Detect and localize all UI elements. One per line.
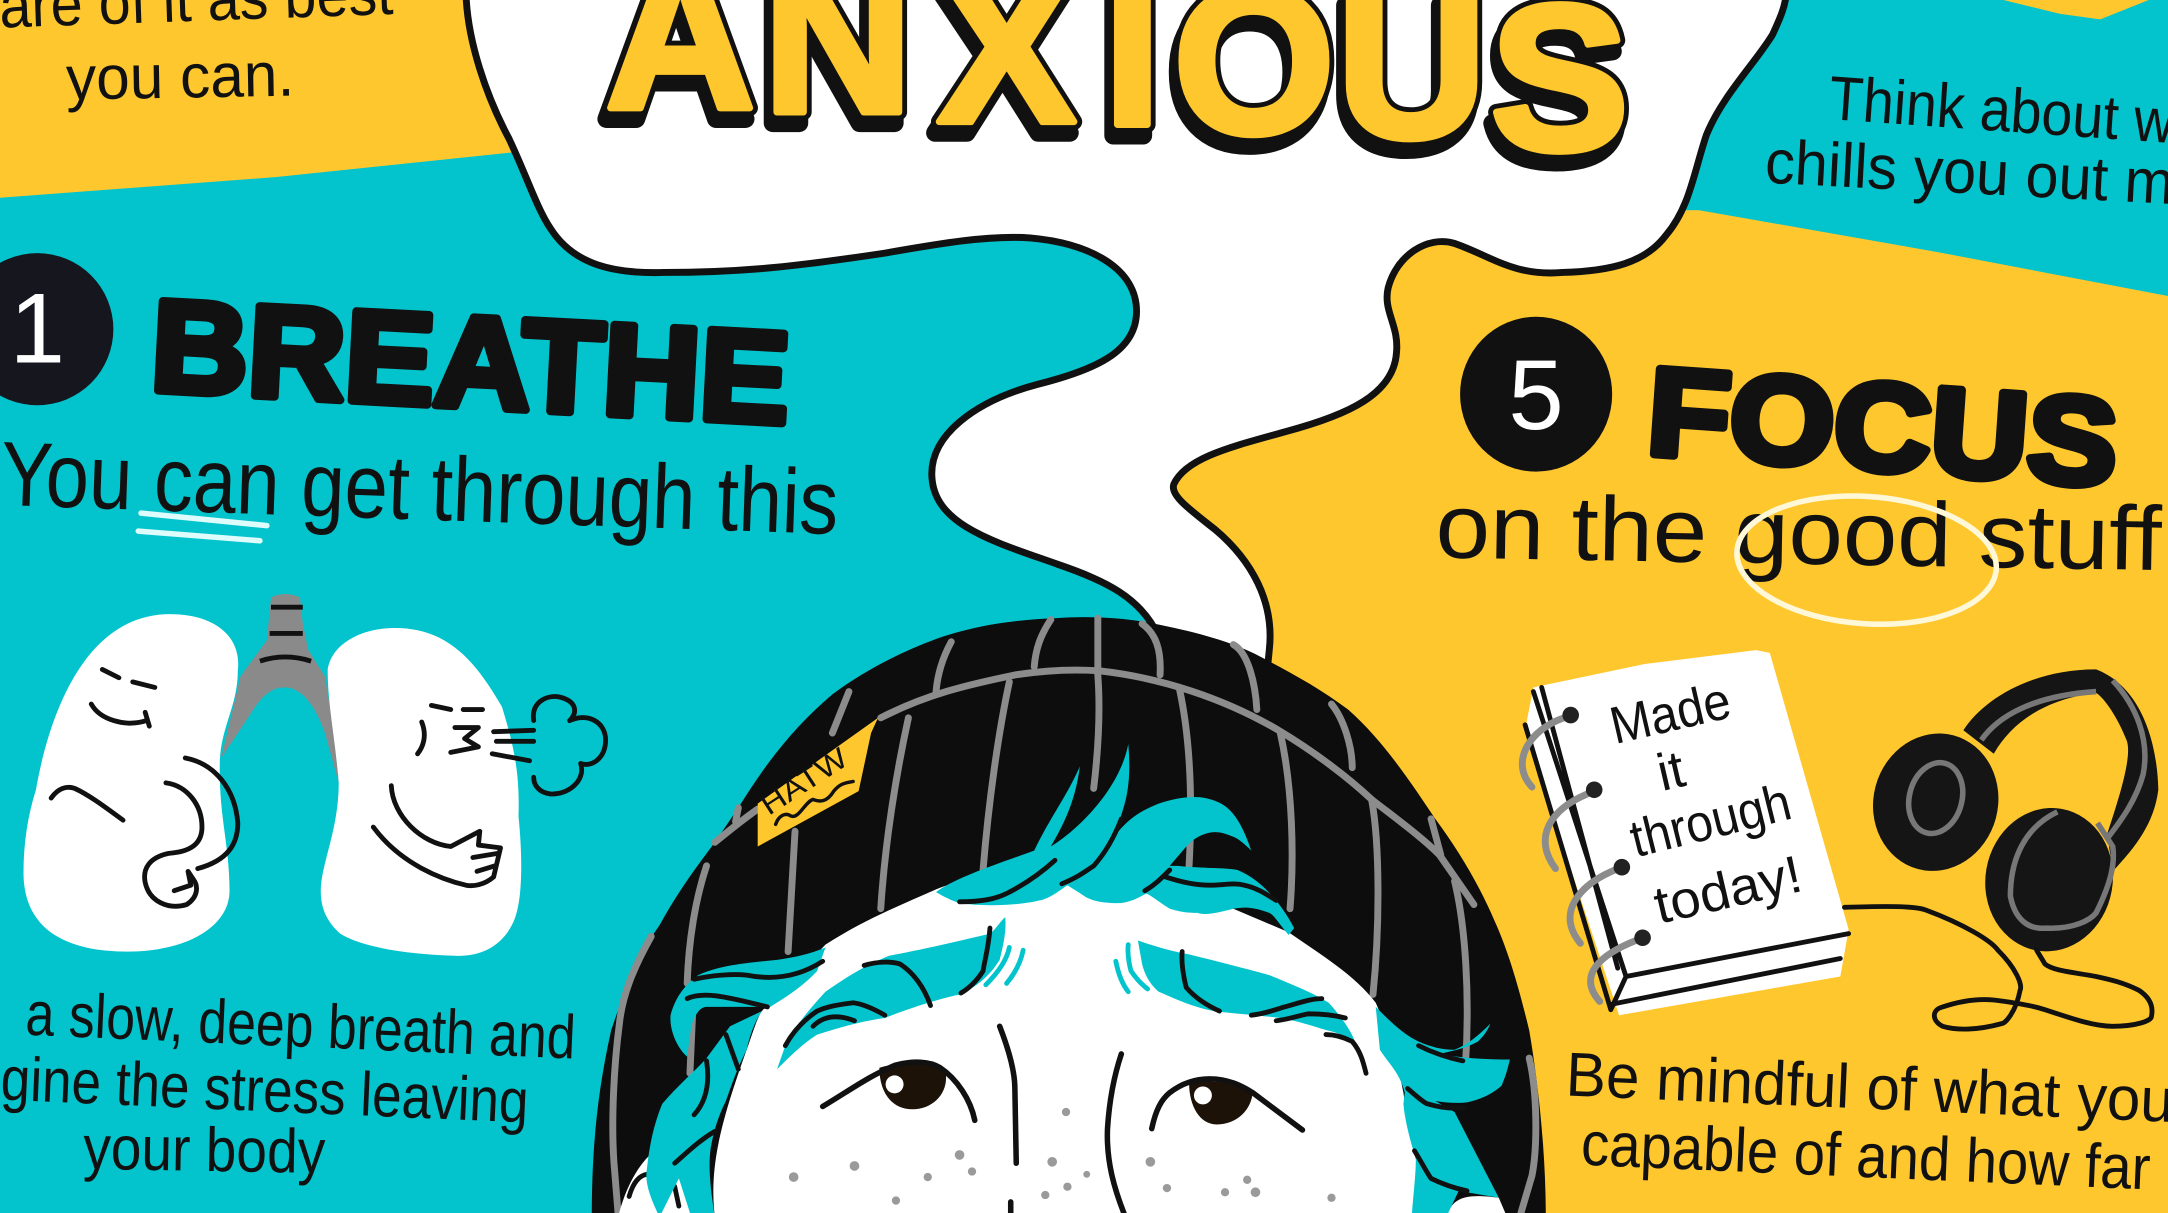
heading: FOCUS: FOCUS bbox=[1643, 342, 2122, 513]
body text: breathe bbox=[0, 980, 577, 1187]
step 1 badge bbox=[0, 253, 113, 405]
body text: breathe: gine the stress leaving bbox=[0, 1045, 530, 1137]
beanie tag: HATW bbox=[755, 742, 854, 822]
highlight ellipse on good bbox=[1732, 488, 2001, 633]
trachea bbox=[221, 594, 339, 783]
right lung bbox=[321, 628, 521, 956]
freckles bbox=[789, 1108, 1336, 1205]
subheading: you can get through this: You can get through this bbox=[0, 423, 840, 554]
right eyebrow bbox=[1138, 941, 1367, 1073]
beanie ribs bbox=[613, 618, 1536, 1213]
hair: left lower strand bbox=[646, 1011, 762, 1213]
body text: breathe: a slow, deep breath and bbox=[24, 980, 577, 1073]
top left text bbox=[0, 0, 394, 114]
ring holes bbox=[1562, 707, 1651, 946]
hair strand lines front bbox=[960, 819, 1276, 902]
thought bubble bbox=[466, 0, 1786, 678]
notebook text: today! bbox=[1649, 845, 1807, 936]
top left text: you can. bbox=[65, 41, 295, 114]
face bbox=[713, 875, 1446, 1213]
body text: breathe: your body bbox=[83, 1114, 326, 1187]
left ear bbox=[618, 1155, 691, 1213]
heading: BREATHE: BREATHE bbox=[148, 272, 793, 451]
notebook text: through bbox=[1624, 772, 1797, 869]
notebook text bbox=[1604, 671, 1807, 936]
top right text bbox=[1764, 64, 2168, 218]
step 1 badge: 1 bbox=[10, 273, 65, 384]
beanie tag bbox=[755, 718, 878, 846]
beanie bbox=[592, 617, 1546, 1213]
body text: focus bbox=[1565, 1040, 2168, 1203]
underline bbox=[138, 513, 267, 541]
right eye bbox=[1152, 1079, 1302, 1130]
hair: right side bbox=[1376, 1007, 1510, 1213]
subheading: on the good stuff: on the good stuff bbox=[1435, 475, 2163, 590]
step 5 badge: 5 bbox=[1508, 340, 1564, 451]
left eyebrow lines bbox=[785, 928, 990, 1046]
hair strand lines right bbox=[1408, 1046, 1467, 1191]
hair strand lines left bbox=[675, 961, 823, 1163]
right eyebrow lines bbox=[1182, 952, 1366, 1073]
left eyebrow ticks bbox=[986, 947, 1023, 985]
left lung face and arms bbox=[51, 669, 238, 906]
left lung bbox=[24, 614, 238, 952]
icon: headphones bbox=[1844, 669, 2158, 1029]
step 5 badge bbox=[1460, 317, 1612, 472]
right eyebrow ticks bbox=[1116, 945, 1148, 992]
notebook text: it bbox=[1651, 739, 1691, 803]
hair: front tuft bbox=[936, 744, 1294, 935]
hair: left side bbox=[670, 947, 825, 1057]
icon: notebook bbox=[1522, 650, 1849, 1015]
icon: lungs bbox=[24, 594, 606, 956]
panel: right yellow focus bbox=[1168, 207, 2168, 1213]
character: anxious person in beanie bbox=[592, 617, 1546, 1213]
left eye bbox=[823, 1062, 975, 1120]
notebook rings bbox=[1522, 718, 1636, 1001]
left eyebrow bbox=[777, 917, 1006, 1069]
right ear bbox=[1446, 1196, 1507, 1213]
title: ANXIOUS bbox=[601, 0, 1629, 204]
left ear lines bbox=[629, 1174, 679, 1206]
panel: top left yellow bbox=[0, 0, 581, 198]
nose lines bbox=[1000, 1026, 1125, 1213]
right lung face and arms bbox=[373, 705, 534, 886]
breath puff bbox=[533, 697, 606, 794]
notebook text: Made bbox=[1604, 671, 1736, 756]
shape: top right yellow corner bbox=[2003, 0, 2149, 19]
